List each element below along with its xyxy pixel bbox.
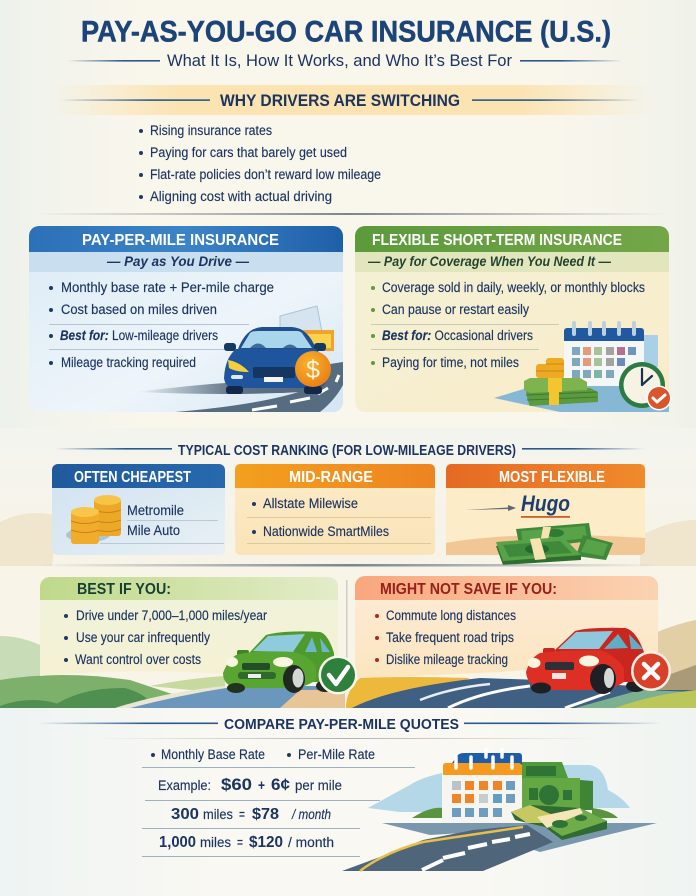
icon: blue car xyxy=(224,327,327,394)
road centre line xyxy=(360,827,523,871)
icon: dollar coin: $ xyxy=(306,356,320,384)
illustration: calendar, cash and road xyxy=(342,749,657,871)
heading: compare pay-per-mile quotes: COMPARE PAY-PER-MILE QUOTES xyxy=(224,717,459,733)
bullets: Dislike mileage tracking xyxy=(386,652,508,667)
result: 1,000 miles: / month xyxy=(288,835,334,850)
landscape: hills and road xyxy=(0,620,696,708)
bullets: Best for: Low-mileage drivers xyxy=(60,328,218,343)
bullets xyxy=(49,280,274,370)
provider: Hugo: Hugo xyxy=(521,491,570,516)
result: 1,000 miles xyxy=(159,834,334,851)
provider list: Allstate Milewise xyxy=(263,496,358,511)
result: 300 miles: miles xyxy=(203,807,233,822)
tagline: — Pay for Coverage When You Need It — xyxy=(367,253,612,269)
icon: stack of cash xyxy=(524,378,598,406)
bullets: Cost based on miles driven xyxy=(61,302,217,317)
icon: wallet and map xyxy=(280,306,334,351)
icon: green check badge xyxy=(318,656,358,694)
panel heading: MOST FLEXIBLE xyxy=(499,469,605,486)
quote example text: Monthly Base Rate xyxy=(161,747,265,762)
arrow xyxy=(465,505,516,511)
icon: green car xyxy=(223,631,334,693)
bullets: Coverage sold in daily, weekly, or monthly blocks xyxy=(382,280,645,295)
bullets xyxy=(64,608,267,667)
result: 1,000 miles: miles xyxy=(200,835,231,850)
panel: might not save if you xyxy=(355,576,658,678)
panel: flexible short-term insurance xyxy=(355,226,672,412)
heading: typical cost ranking: TYPICAL COST RANKING (FOR LOW-MILEAGE DRIVERS) xyxy=(178,443,516,459)
example calculation: $60 xyxy=(221,776,252,794)
panel heading: PAY-PER-MILE INSURANCE xyxy=(82,232,279,249)
panel heading: MIGHT NOT SAVE IF YOU: xyxy=(380,581,557,598)
quote example text xyxy=(142,747,415,857)
result: 1,000 miles: = xyxy=(237,835,243,850)
bullets: Commute long distances xyxy=(386,608,516,623)
bullet list: reasons for switching: Paying for cars that barely get used xyxy=(150,145,347,160)
bullets: Best for: Occasional drivers xyxy=(382,328,533,343)
road xyxy=(342,825,553,871)
result: 1,000 miles: $120 xyxy=(249,834,283,851)
illustration: ground shadow xyxy=(494,378,669,412)
panel heading: FLEXIBLE SHORT-TERM INSURANCE xyxy=(372,232,622,249)
icon: red x badge xyxy=(631,651,671,691)
panel heading: MID-RANGE xyxy=(289,469,373,486)
panel: pay-per-mile insurance xyxy=(29,226,343,412)
icon: clock xyxy=(619,362,665,408)
provider list xyxy=(100,503,224,544)
panel: mid-range xyxy=(235,464,435,555)
provider list: Nationwide SmartMiles xyxy=(263,524,389,539)
quote example text: Per-Mile Rate xyxy=(298,747,375,762)
example calculation: 6¢ xyxy=(271,776,290,794)
background: suitability section xyxy=(0,566,696,708)
bullet list: reasons for switching xyxy=(139,123,381,204)
icon: dollar coin xyxy=(295,351,331,387)
result: 300 miles xyxy=(171,806,331,823)
example calculation: + xyxy=(258,777,265,794)
icon: cash bundle xyxy=(496,523,613,565)
road dashes xyxy=(422,834,530,870)
panel: often cheapest xyxy=(52,464,225,555)
provider list xyxy=(247,496,431,544)
icon: check badge xyxy=(646,386,672,410)
panel: best if you xyxy=(40,577,338,676)
bushes xyxy=(412,808,618,818)
result: 300 miles: 300 xyxy=(171,806,199,823)
panel heading: OFTEN CHEAPEST xyxy=(74,469,191,486)
heading band: why drivers are switching xyxy=(50,85,650,115)
result: 300 miles: / month xyxy=(291,807,331,822)
sky wash xyxy=(368,765,630,812)
title: PAY-AS-YOU-GO CAR INSURANCE (U.S.) xyxy=(81,16,611,48)
bullet list: reasons for switching: Flat-rate policies don’t reward low mileage xyxy=(150,167,381,182)
result: 300 miles: = xyxy=(239,807,245,822)
cash behind calendar xyxy=(522,762,593,811)
provider list: Metromile xyxy=(127,503,184,518)
heading band: why drivers are switching: WHY DRIVERS ARE SWITCHING xyxy=(220,92,460,110)
bullets: Want control over costs xyxy=(75,652,201,667)
background: top section xyxy=(0,0,696,428)
example calculation xyxy=(158,776,342,794)
bullets: Use your car infrequently xyxy=(76,630,210,645)
provider list: Mile Auto xyxy=(127,523,180,538)
bullets: Take frequent road trips xyxy=(386,630,514,645)
example calculation: Example: xyxy=(158,778,211,793)
bullets xyxy=(371,280,645,370)
bullets: Mileage tracking required xyxy=(61,355,196,370)
panel: most flexible xyxy=(446,464,645,565)
icon: coin stacks xyxy=(66,495,121,544)
example calculation: per mile xyxy=(295,778,342,793)
cash stack in front xyxy=(511,805,607,840)
bullets: Drive under 7,000–1,000 miles/year xyxy=(76,608,267,623)
subtitle: What It Is, How It Works, and Who It’s Best For xyxy=(167,52,513,70)
bullets xyxy=(375,608,516,667)
icon: calendar xyxy=(564,323,658,386)
background: compare section xyxy=(0,708,696,896)
bullet list: reasons for switching: Rising insurance rates xyxy=(150,123,272,138)
tagline: — Pay as You Drive — xyxy=(106,253,250,269)
background: ranking section xyxy=(0,428,696,566)
icon: red car xyxy=(526,628,646,694)
bullets: Monthly base rate + Per-mile charge xyxy=(61,280,274,295)
icon: road xyxy=(137,362,343,412)
result: 1,000 miles: 1,000 xyxy=(159,834,196,851)
calendar xyxy=(442,749,522,823)
ground xyxy=(382,823,657,852)
bullets: Paying for time, not miles xyxy=(382,355,519,370)
panel heading: BEST IF YOU: xyxy=(77,581,171,598)
result: 300 miles: $78 xyxy=(252,806,279,823)
bullets: Can pause or restart easily xyxy=(382,302,529,317)
bullet list: reasons for switching: Aligning cost with actual driving xyxy=(150,189,332,204)
icon: coins xyxy=(536,358,564,379)
